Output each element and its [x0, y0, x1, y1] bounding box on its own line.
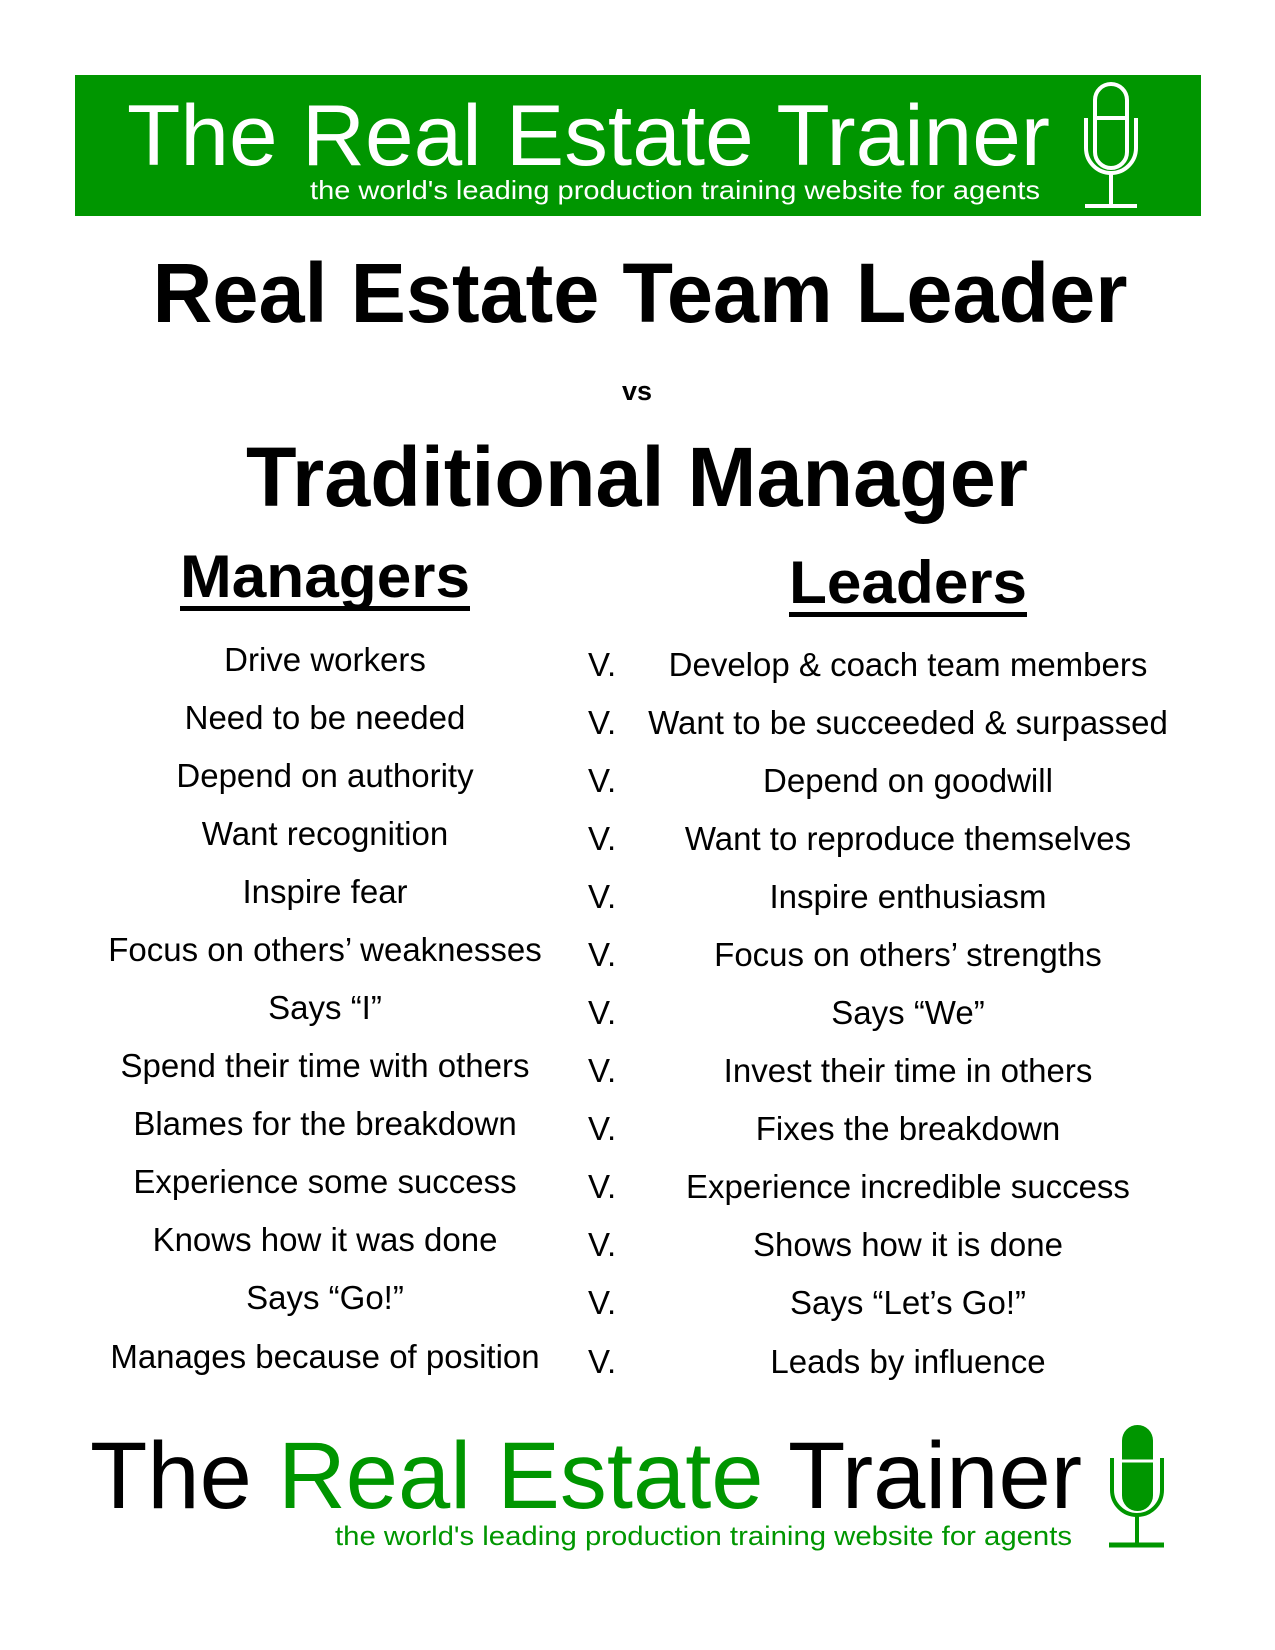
- leaders column: Says “Let’s Go!”: [790, 1284, 1026, 1321]
- managers column: Depend on authority: [176, 757, 474, 794]
- managers column: Manages because of position: [110, 1338, 540, 1375]
- footer tagline: the world's leading production training website for agents: [335, 1521, 1072, 1551]
- leaders column: Experience incredible success: [686, 1168, 1130, 1205]
- managers column: Says “I”: [268, 989, 382, 1026]
- versus markers: [588, 646, 616, 1380]
- versus markers: V.: [588, 820, 616, 857]
- managers column: Knows how it was done: [153, 1221, 497, 1258]
- banner title: The Real Estate Trainer: [127, 88, 1050, 184]
- title: Real Estate Team Leader: [152, 246, 1128, 340]
- leaders column: Leads by influence: [770, 1343, 1046, 1380]
- managers column: Spend their time with others: [120, 1047, 530, 1084]
- managers column: Blames for the breakdown: [133, 1105, 517, 1142]
- managers column: Inspire fear: [242, 873, 408, 910]
- banner tagline: the world's leading production training website for agents: [310, 175, 1040, 205]
- managers column: Drive workers: [224, 641, 426, 678]
- leaders column: Says “We”: [831, 994, 985, 1031]
- leaders column: Inspire enthusiasm: [770, 878, 1046, 915]
- versus markers: V.: [588, 994, 616, 1031]
- managers column: Focus on others’ weaknesses: [108, 931, 542, 968]
- versus markers: V.: [588, 1168, 616, 1205]
- footer logo: [90, 1423, 1164, 1551]
- vs: vs: [622, 376, 652, 406]
- versus markers: V.: [588, 1052, 616, 1089]
- leaders column: Fixes the breakdown: [756, 1110, 1060, 1147]
- leaders column: Depend on goodwill: [763, 762, 1053, 799]
- versus markers: V.: [588, 704, 616, 741]
- leaders column: [648, 646, 1168, 1380]
- managers column: Experience some success: [133, 1163, 517, 1200]
- footer title: The Real Estate Trainer: [90, 1423, 1082, 1529]
- leaders column: Develop & coach team members: [669, 646, 1147, 683]
- header banner: [75, 75, 1201, 216]
- leaders column: Shows how it is done: [753, 1226, 1063, 1263]
- managers column: Need to be needed: [185, 699, 465, 736]
- heading: Leaders: Leaders: [789, 549, 1027, 616]
- versus markers: V.: [588, 646, 616, 683]
- leaders column: Want to be succeeded & surpassed: [648, 704, 1168, 741]
- versus markers: V.: [588, 1284, 616, 1321]
- managers column: Want recognition: [202, 815, 448, 852]
- versus markers: V.: [588, 762, 616, 799]
- icon: microphone (green): [1109, 1425, 1164, 1545]
- leaders column: Want to reproduce themselves: [685, 820, 1131, 857]
- icon: microphone (white): [1085, 84, 1137, 206]
- versus markers: V.: [588, 878, 616, 915]
- managers column: Says “Go!”: [246, 1279, 404, 1316]
- comparison list: [108, 641, 1168, 1380]
- heading: Managers: Managers: [180, 543, 470, 610]
- leaders column: Invest their time in others: [724, 1052, 1092, 1089]
- subtitle: Traditional Manager: [246, 430, 1028, 524]
- leaders column: Focus on others’ strengths: [714, 936, 1102, 973]
- versus markers: V.: [588, 1226, 616, 1263]
- versus markers: V.: [588, 1343, 616, 1380]
- versus markers: V.: [588, 1110, 616, 1147]
- versus markers: V.: [588, 936, 616, 973]
- managers column: [108, 641, 542, 1375]
